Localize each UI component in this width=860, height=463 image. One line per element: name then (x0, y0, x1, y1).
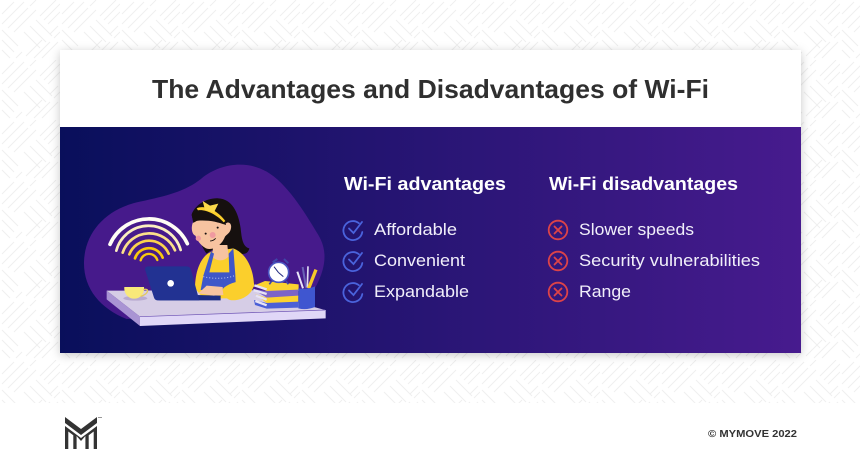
list item: Convenient (343, 252, 465, 271)
coffee cup (123, 287, 148, 301)
list item: Security vulnerabilities: Security vulnerabilities (579, 252, 760, 270)
copyright: © MYMOVE 2022 (708, 429, 797, 440)
list item: Slower speeds: Slower speeds (579, 221, 694, 239)
title: The Advantages and Disadvantages of Wi-Fi (152, 74, 709, 104)
logo: MyMove M mark (65, 417, 102, 449)
blob background (84, 165, 324, 319)
list item: Affordable: Affordable (374, 221, 457, 239)
icon: Wi-Fi signal arcs (110, 219, 187, 260)
panel: gradient background (60, 127, 801, 353)
list item: Range (549, 283, 631, 301)
icon: check (343, 252, 362, 271)
panel: disadvantages column (549, 174, 760, 301)
illustration: woman using laptop with Wi-Fi (84, 165, 326, 326)
panel: main card (60, 50, 801, 353)
pencil holder (297, 266, 316, 309)
panel: title band (60, 50, 801, 127)
alarm clock (269, 259, 289, 284)
icon: check (343, 283, 362, 302)
hands and forearm (198, 281, 254, 300)
list item: Expandable (343, 283, 469, 302)
panel: advantages column (343, 174, 506, 302)
stack of books (253, 281, 299, 309)
list item: Range: Range (579, 283, 631, 301)
icon: cross (549, 221, 567, 239)
icon: cross (549, 252, 567, 270)
desk (107, 290, 326, 326)
icon: cross (549, 283, 567, 301)
icon: check (343, 221, 362, 240)
woman (192, 198, 254, 298)
heading: advantages: Wi-Fi advantages (344, 174, 506, 194)
list item: Expandable: Expandable (374, 283, 469, 301)
laptop (145, 266, 221, 300)
list item: Affordable (343, 221, 457, 240)
heading: disadvantages: Wi-Fi disadvantages (549, 174, 738, 194)
list item: Convenient: Convenient (374, 252, 465, 270)
